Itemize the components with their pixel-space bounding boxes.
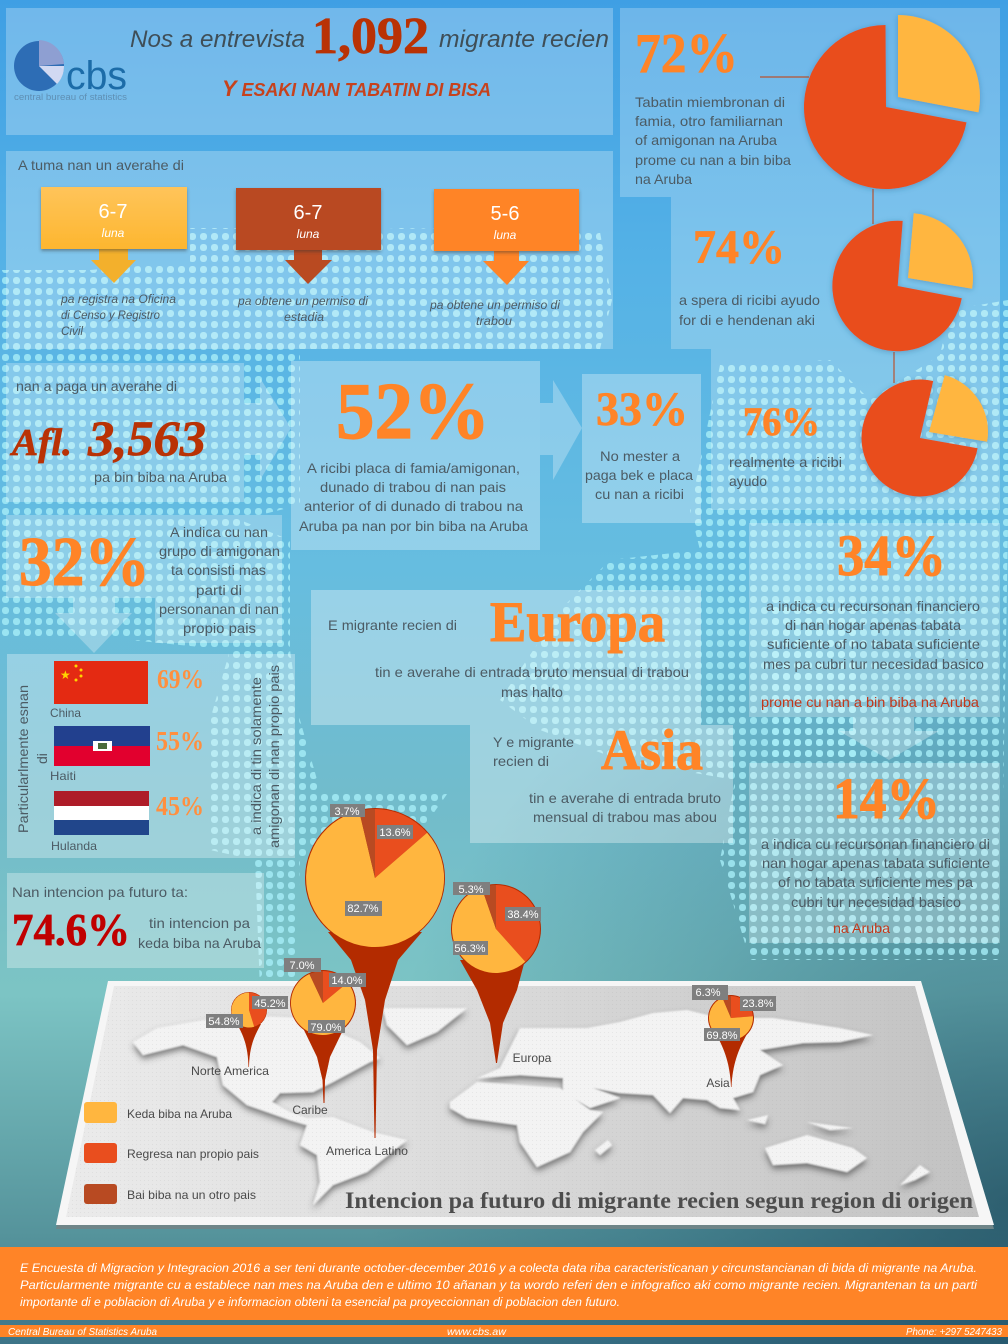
- pin: Asia: [692, 985, 776, 1090]
- panel: 34%: [749, 523, 1000, 717]
- stat: 72%: 72%: [635, 23, 738, 85]
- text: vertical left: di: [34, 753, 50, 764]
- stat: 72%: [635, 23, 791, 187]
- panel: future intention: 74.6%: [12, 904, 130, 955]
- callout: register months: Civil: [61, 324, 83, 338]
- pin: Asia: Asia: [706, 1076, 730, 1090]
- panel: countries: [7, 654, 295, 858]
- text: intro: A tuma nan un averahe di: [18, 157, 184, 173]
- logo: cbs: cbs: [66, 54, 127, 98]
- panel: 52%: Aruba pa nan por bin biba na Aruba: [299, 518, 528, 534]
- text: vertical left: [15, 685, 50, 833]
- map title: Intencion pa futuro di migrante recien segun region di origen: [345, 1188, 973, 1213]
- footer: contact strip: www.cbs.aw: [447, 1326, 507, 1338]
- panel: Asia: recien di: [493, 753, 549, 769]
- footer: survey note: [0, 1247, 1008, 1320]
- subheading: Y ESAKI NAN TABATIN DI BISA: [222, 76, 491, 101]
- panel: 33%: cu nan a ricibi: [595, 486, 684, 502]
- panel: 34%: mes pa cubri tur necesidad basico: [763, 656, 984, 672]
- heading: interviewed: [130, 8, 609, 65]
- pie: 74%: [832, 213, 973, 351]
- pin: Europa: 38.4%: [507, 909, 539, 921]
- callout: work permit months: trabou: [476, 314, 512, 328]
- panel: Europa: Europa: [490, 591, 665, 654]
- panel: average paid: Afl.: [10, 422, 72, 464]
- panel: 32% friends: personanan di nan: [159, 601, 279, 617]
- panel: 52%: A ricibi placa di famia/amigonan,: [307, 460, 520, 476]
- panel: average paid: 3,563: [87, 410, 206, 466]
- footer: contact strip: [0, 1325, 1008, 1338]
- connector lines: [760, 77, 894, 383]
- stat: 76%: ayudo: [729, 473, 767, 489]
- panel: 34%: a indica cu recursonan financiero: [766, 598, 980, 614]
- heading: interviewed: migrante recien: [439, 26, 609, 53]
- pin: Asia: 6.3%: [695, 987, 721, 999]
- stat: 72%: famia, otro familiarnan: [635, 113, 783, 129]
- pin: America Latino: 3.7%: [334, 806, 360, 818]
- heading: interviewed: Nos a entrevista: [130, 26, 305, 53]
- panel: 14%: [749, 763, 1000, 943]
- footer: contact strip: Central Bureau of Statistics Aruba: [8, 1326, 157, 1338]
- panel: average paid: nan a paga un averahe di: [16, 378, 177, 394]
- text: vertical right: [248, 665, 282, 848]
- panel: 32% friends: A indica cu nan: [170, 524, 268, 540]
- footer: contact strip: Phone: +297 5247433: [906, 1326, 1002, 1338]
- stat: 76%: [729, 399, 842, 489]
- panel: 34%: 34%: [837, 523, 946, 588]
- panel: 32% friends: grupo di amigonan: [159, 543, 280, 559]
- stat: 74%: a spera di ricibi ayudo: [679, 292, 820, 308]
- pin: Europa: 56.3%: [454, 943, 486, 955]
- panel: family network pies: [620, 8, 1000, 510]
- callout: register months: luna: [102, 226, 125, 240]
- stat: 72%: Tabatin miembronan di: [635, 94, 785, 110]
- pin: Caribe: [284, 958, 366, 1117]
- legend: other country: [84, 1184, 256, 1204]
- stat: 74%: for di e hendenan aki: [679, 312, 815, 328]
- panel: 14%: of no tabata suficiente mes pa: [778, 874, 973, 890]
- pin: America Latino: 13.6%: [379, 827, 411, 839]
- panel: 34%: prome cu nan a bin biba na Aruba: [761, 694, 979, 710]
- arrow: 34% to 14%: [839, 717, 939, 760]
- logo: cbs: central bureau of statistics: [14, 92, 128, 102]
- legend: other country: Bai biba na un otro pais: [127, 1188, 256, 1202]
- legend: return: Regresa nan propio pais: [127, 1147, 259, 1161]
- panel: 14%: na Aruba: [833, 920, 890, 936]
- panel: Asia: tin e averahe di entrada bruto: [529, 790, 721, 806]
- panel: 32% friends: propio pais: [183, 620, 256, 636]
- text: vertical left: Particularlmente esnan: [15, 685, 31, 833]
- pin: Europa: 5.3%: [458, 884, 484, 896]
- text: vertical right: a indica di tin solamente: [248, 677, 264, 835]
- panel: 52%: [291, 361, 540, 550]
- stat: 72%: na Aruba: [635, 171, 692, 187]
- pin: Asia: 69.8%: [706, 1030, 738, 1042]
- callout: residence permit months: pa obtene un permiso di: [237, 294, 368, 308]
- panel: 34%: di nan hogar apenas tabata: [785, 617, 961, 633]
- flag: Hulanda: Hulanda: [51, 839, 97, 853]
- footer: survey note: E Encuesta di Migracion y Integracion 2016 a ser teni durante october-december 2016 y a colecta data riba caracteristicanan y circunstancianan di bida di migrante na Aruba.: [20, 1263, 977, 1275]
- panel: Europa: [311, 590, 701, 725]
- pin: Norte America: [191, 992, 288, 1078]
- panel: 32% friends: 32%: [19, 524, 150, 601]
- text: vertical right: amigonan di nan propio pais: [266, 665, 282, 848]
- panel: 32% friends: ta consisti mas: [171, 562, 266, 578]
- panel: 52%: anterior of di dunado di trabou na: [304, 498, 523, 514]
- panel: 33%: [582, 374, 701, 523]
- panel: future intention: tin intencion pa: [149, 915, 250, 931]
- callout: work permit months: 5-6: [491, 203, 519, 225]
- panel: 52%: 52%: [336, 368, 490, 456]
- panel: average paid: [6, 363, 244, 502]
- panel: 52%: dunado di trabou di nan pais: [320, 479, 506, 495]
- flag: China: [50, 661, 204, 720]
- pin: Asia: 23.8%: [742, 998, 774, 1010]
- panel: Europa: E migrante recien di: [328, 617, 457, 633]
- callout: residence permit months: luna: [297, 227, 320, 241]
- pin: Caribe: Caribe: [292, 1103, 328, 1117]
- arrow: to 52%: [244, 378, 291, 480]
- pin: Caribe: 14.0%: [331, 975, 363, 987]
- pie: 72%: [804, 15, 980, 189]
- panel: Asia: Asia: [601, 719, 703, 782]
- flag: Hulanda: [51, 791, 204, 853]
- panel: 14%: cubri tur necesidad basico: [791, 894, 961, 910]
- flag: Hulanda: 45%: [156, 791, 204, 821]
- callout: register months: pa registra na Oficina: [60, 292, 176, 306]
- panel: future intention: keda biba na Aruba: [138, 935, 261, 951]
- callout: work permit months: luna: [494, 228, 517, 242]
- flag: China: ★: [60, 668, 71, 682]
- panel: average paid: pa bin biba na Aruba: [94, 469, 227, 485]
- flag: Haiti: 55%: [156, 726, 204, 756]
- pin: Caribe: 7.0%: [289, 960, 315, 972]
- panel: 14%: a indica cu recursonan financiero di: [761, 836, 990, 852]
- panel: future intention: [7, 873, 264, 968]
- footer: survey note: Particularmente migrante cu a establece nan mes na Aruba den e ultimo 10 añanan y ta wordo referi den e infografico aki como migrante recien. Migrantenan ta un parti: [20, 1280, 977, 1292]
- callout: register months: 6-7: [99, 201, 127, 223]
- stat: 72%: prome cu nan a bin biba: [635, 152, 791, 168]
- panel: Asia: [470, 719, 733, 843]
- panel: Asia: mensual di trabou mas abou: [533, 809, 717, 825]
- flag: Haiti: Haiti: [50, 769, 76, 783]
- panel: 14%: nan hogar apenas tabata suficiente: [762, 855, 990, 871]
- arrow: down to flags: [55, 598, 132, 653]
- legend: stay: [84, 1102, 232, 1123]
- panel: 33%: 33%: [596, 383, 688, 436]
- callout: register months: di Censo y Registro: [61, 308, 160, 322]
- panel: future intention: Nan intencion pa futuro ta:: [12, 884, 188, 900]
- pie: 76%: [861, 375, 988, 496]
- stat: 74%: 74%: [693, 221, 785, 274]
- pin: Europa: Europa: [513, 1051, 552, 1065]
- panel: 32% friends: parti di: [196, 582, 242, 598]
- callout: residence permit months: estadia: [284, 310, 324, 324]
- pin: Europa: [451, 882, 552, 1065]
- arrow: to 33%: [540, 380, 582, 480]
- continents: [133, 1008, 930, 1205]
- panel: 33%: No mester a: [600, 448, 680, 464]
- panel: Europa: mas halto: [501, 684, 563, 700]
- panel: Asia: Y e migrante: [493, 734, 574, 750]
- legend: stay: Keda biba na Aruba: [127, 1107, 232, 1121]
- callout: work permit months: [429, 189, 579, 328]
- pin: America Latino: [305, 804, 445, 1158]
- stat: 76%: realmente a ricibi: [729, 454, 842, 470]
- stat: 74%: [679, 221, 820, 328]
- panel: Europa: tin e averahe di entrada bruto mensual di trabou: [375, 664, 689, 680]
- logo: cbs: [14, 40, 128, 102]
- stat: 76%: 76%: [743, 399, 820, 444]
- panel: 32% friends: [6, 515, 282, 643]
- panel: header: [6, 8, 613, 135]
- callout: residence permit months: 6-7: [294, 202, 322, 224]
- pin: America Latino: America Latino: [326, 1144, 408, 1158]
- panel: 14%: 14%: [833, 766, 940, 831]
- pin: America Latino: 82.7%: [347, 903, 379, 915]
- legend: return: [84, 1143, 259, 1163]
- panel: 33%: paga bek e placa: [585, 467, 693, 483]
- heading: interviewed: 1,092: [312, 8, 429, 65]
- pin: Caribe: 79.0%: [310, 1022, 342, 1034]
- pin: Norte America: 45.2%: [254, 998, 286, 1010]
- flag: Haiti: [50, 726, 204, 783]
- flag: China: China: [50, 706, 81, 720]
- stat: 72%: of amigonan na Aruba: [635, 132, 777, 148]
- world map board: [56, 981, 994, 1229]
- pin: Norte America: Norte America: [191, 1064, 269, 1078]
- footer: survey note: importante di e poblacion di Aruba y e informacion obteni ta esencial pa proyeccionnan di poblacion den futuro.: [20, 1297, 620, 1309]
- panel: waiting months: [6, 151, 613, 349]
- callout: residence permit months: [236, 188, 381, 324]
- callout: work permit months: pa obtene un permiso di: [429, 298, 560, 312]
- flag: China: 69%: [157, 664, 204, 694]
- pin: Norte America: 54.8%: [208, 1016, 240, 1028]
- legend: [84, 1102, 259, 1204]
- callout: register months: [41, 187, 187, 338]
- panel: 34%: suficiente of no tabata suficiente: [767, 636, 980, 652]
